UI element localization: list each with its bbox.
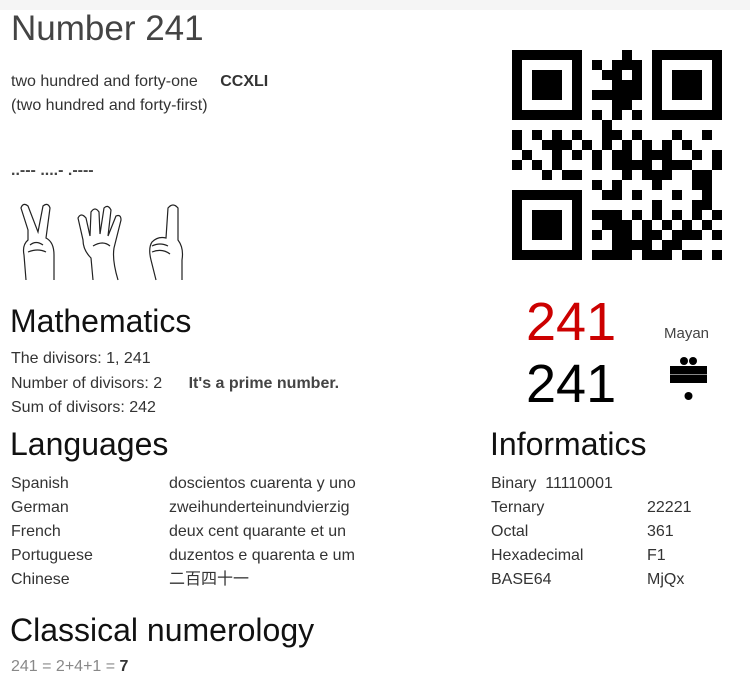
table: languages: 二百四十一 [169,571,249,588]
big number red: 241 [526,292,616,352]
text: number in words [11,73,268,114]
table: informatics: F1 [647,547,666,564]
table: languages: French [11,523,61,540]
text: divisors: Number of divisors: 2 It's a prime number. [11,374,339,392]
text: number in words: two hundred and forty-one CCXLI [11,73,268,90]
table: languages [11,475,356,588]
table: languages: doscientos cuarenta y uno [169,475,356,492]
table: informatics: 361 [647,523,674,540]
table: languages: duzentos e quarenta e um [169,547,355,564]
text: divisors: Sum of divisors: 242 [11,399,156,416]
table: languages: zweihunderteinundvierzig [169,499,350,516]
table: informatics: MjQx [647,571,684,588]
table: languages: Portuguese [11,547,93,564]
text: number in words: (two hundred and forty-first) [11,97,208,114]
table: informatics: BASE64 [491,571,551,588]
table: languages: German [11,499,69,516]
table: informatics: Octal [491,523,528,540]
icon: sign language hands [20,204,184,280]
text: divisors [11,350,339,416]
qr code [512,50,722,260]
morse code: ..--- ....- .---- [11,162,94,179]
table: informatics: 22221 [647,499,692,516]
table: informatics: Binary 11110001 [491,475,613,492]
heading: mathematics: Mathematics [10,303,191,339]
table: languages: deux cent quarante et un [169,523,346,540]
table: informatics [491,475,692,588]
big number black: 241 [526,354,616,414]
table: informatics: Ternary [491,499,544,516]
heading: languages: Languages [10,426,168,462]
title: Number 241 [11,9,204,48]
mayan label: Mayan [664,325,709,342]
table: languages: Spanish [11,475,69,492]
text: divisors: The divisors: 1, 241 [11,350,151,367]
icon: mayan numeral [670,357,707,400]
heading: classical numerology: Classical numerology [10,612,314,648]
heading: informatics: Informatics [490,426,646,462]
table: languages: Chinese [11,571,70,588]
table: informatics: Hexadecimal [491,547,583,564]
text: numerology: 241 = 2+4+1 = 7 [11,658,128,675]
